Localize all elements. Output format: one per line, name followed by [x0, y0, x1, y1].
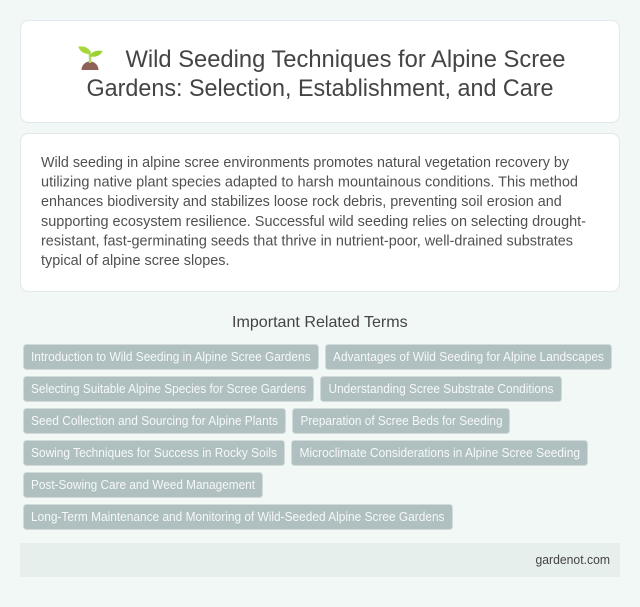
footer source text: gardenot.com	[536, 552, 610, 567]
chip: microclimate: Microclimate Considerations in Alpine Scree Seeding	[300, 446, 580, 460]
chip: long-term: Long-Term Maintenance and Monitoring of Wild-Seeded Alpine Scree Gardens	[31, 510, 444, 524]
paragraph: resistant, fast-germinating seeds that thrive in nutrient-poor, well-drained substrates	[41, 233, 573, 249]
chip: preparation	[292, 408, 510, 434]
chip: substrate: Understanding Scree Substrate Conditions	[328, 382, 554, 396]
title text: Gardens: Selection, Establishment, and Care	[86, 75, 554, 102]
chip: sowing	[24, 440, 284, 466]
footer bar	[20, 543, 620, 577]
chip: seed collection: Seed Collection and Sourcing for Alpine Plants	[31, 414, 278, 428]
chip: introduction	[24, 344, 318, 370]
panel: introduction text	[20, 134, 620, 292]
panel: title card	[20, 20, 620, 122]
chip: post-sowing: Post-Sowing Care and Weed Management	[31, 478, 255, 492]
chip: introduction: Introduction to Wild Seeding in Alpine Scree Gardens	[31, 350, 310, 364]
chip: preparation: Preparation of Scree Beds for Seeding	[300, 414, 502, 428]
chip: microclimate	[292, 440, 588, 466]
paragraph: utilizing native plant species adapted to harsh mountainous conditions. This method	[41, 175, 578, 191]
chip: selecting species	[24, 376, 314, 402]
chip: selecting species: Selecting Suitable Alpine Species for Scree Gardens	[31, 382, 306, 396]
paragraph	[41, 155, 586, 269]
paragraph: Wild seeding in alpine scree environments promotes natural vegetation recovery by	[41, 155, 570, 171]
paragraph: enhances biodiversity and stabilizes loose rock debris, preventing soil erosion and	[41, 194, 562, 210]
panel: related term chips	[24, 344, 612, 530]
title text	[86, 46, 566, 102]
chip: post-sowing	[24, 472, 262, 498]
paragraph: supporting ecosystem resilience. Successful wild seeding relies on selecting drought-	[41, 214, 586, 230]
chip: sowing: Sowing Techniques for Success in Rocky Soils	[31, 446, 277, 460]
icon: seedling	[78, 46, 102, 70]
chip: advantages	[326, 344, 612, 370]
chip: seed collection	[24, 408, 286, 434]
chip: substrate	[320, 376, 562, 402]
title text: Wild Seeding Techniques for Alpine Scree	[126, 46, 566, 73]
chip: long-term	[24, 504, 452, 530]
chip: advantages: Advantages of Wild Seeding for Alpine Landscapes	[333, 350, 604, 364]
paragraph: typical of alpine scree slopes.	[41, 253, 230, 269]
heading: important related terms: Important Related Terms	[232, 314, 408, 331]
